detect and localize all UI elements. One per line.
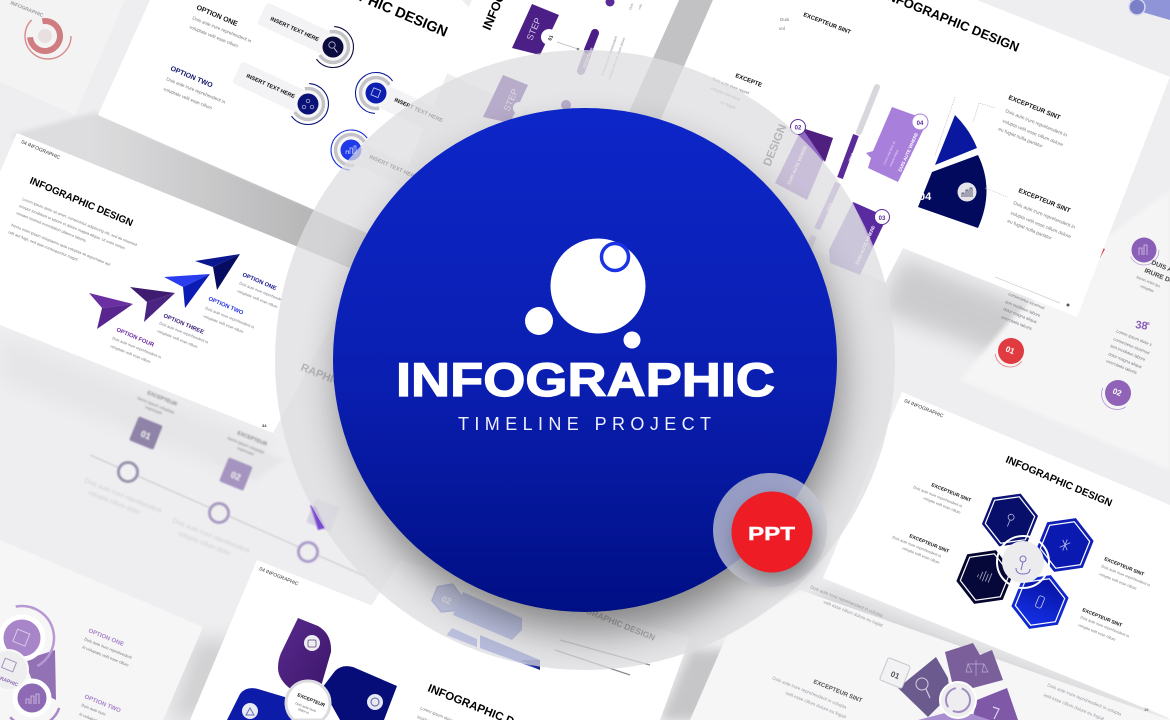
pie label: 04 bbox=[919, 191, 932, 203]
body text: Lorem ipsum dolor sit amet, consectetur adipiscing elit, sed do eiusmod bbox=[22, 196, 138, 247]
vertical word: DESIGN bbox=[762, 123, 789, 168]
option two: Duis aute irure reprehenderit in bbox=[205, 306, 255, 330]
badge: 01 bbox=[995, 337, 1025, 367]
petal chart: 01 bbox=[889, 670, 901, 681]
text block 1: Duis aute irure reprehenderit in bbox=[913, 485, 963, 509]
card: 02: Nemo ipsum voluptate bbox=[227, 435, 266, 455]
arrow four bbox=[89, 293, 133, 329]
icon: purple chart circle bbox=[1129, 235, 1159, 265]
left text: EXCEPTEUR SINT bbox=[812, 679, 863, 704]
card right: DUIS AUTE WHERE bbox=[897, 132, 919, 172]
text block 1: volupta velit esse cillum bbox=[923, 496, 961, 515]
option three: Duis aute irure reprehenderit in bbox=[159, 321, 209, 345]
arrow two bbox=[164, 274, 210, 308]
option one: in voluptate velit esse cillum bbox=[82, 644, 130, 668]
option two bbox=[79, 694, 122, 720]
pill: insert text 3 bbox=[371, 82, 445, 133]
left body text: dolor magna aliqua bbox=[1003, 306, 1038, 325]
timeline nodes bbox=[118, 462, 318, 562]
icon: chart bbox=[329, 128, 373, 172]
arrow one bbox=[195, 254, 240, 290]
circle shadow bbox=[340, 132, 840, 632]
step text: volu bbox=[637, 3, 643, 10]
timeline captions bbox=[83, 477, 251, 558]
body text: veniam nostrud exercitation ullamco laboris. bbox=[16, 210, 88, 243]
badge: PPT: PPT bbox=[748, 523, 796, 544]
card bottom: DUIS AUTE WHERE bbox=[854, 225, 876, 265]
option four: Duis aute irure reprehenderit in bbox=[112, 336, 162, 360]
icon: red target bbox=[25, 13, 71, 59]
text block 2: Duis aute irure reprehenderit in bbox=[892, 535, 942, 559]
timeline captions: volupta cillum dolor bbox=[177, 530, 232, 558]
card: 01: EXCEPTEUR bbox=[146, 390, 178, 408]
left text: velit esse cillum dolore eu fugiat bbox=[785, 690, 848, 720]
option one bbox=[189, 4, 253, 49]
step pill: EXCEPTEUR bbox=[582, 47, 594, 68]
text block 4: volupta velit esse cillum bbox=[1078, 623, 1116, 642]
text block 1 bbox=[913, 482, 972, 515]
step text bbox=[600, 2, 643, 80]
card bottom bbox=[829, 202, 890, 275]
card: 02: expersant bbox=[237, 445, 256, 457]
left text bbox=[772, 675, 863, 720]
navy petal bbox=[322, 666, 397, 720]
pie icon bbox=[958, 182, 976, 202]
red marker bbox=[1100, 247, 1105, 258]
hexagon 02 bbox=[429, 579, 465, 617]
body text bbox=[8, 196, 138, 267]
left body text: exercitatio laboris bbox=[1001, 314, 1033, 331]
pie connectors bbox=[935, 97, 1008, 197]
option one: Duis aute irure reprehenderit in bbox=[192, 15, 253, 44]
text top left: Duis bbox=[780, 17, 790, 22]
page number: 34 bbox=[262, 423, 267, 428]
card right: 04 bbox=[917, 121, 924, 127]
option four: voluptate velit esse cillum bbox=[110, 344, 151, 364]
subtitle: TIMELINE PROJECT bbox=[458, 414, 711, 434]
badge: 02: 02 bbox=[1111, 387, 1123, 398]
timeline captions: volupta cillum dolor bbox=[87, 489, 142, 517]
slide: top left faded target bbox=[0, 0, 125, 115]
slide: purple cards + pie bbox=[640, 0, 1170, 317]
text block 2: volupta velit esse cillum bbox=[902, 546, 940, 565]
faded lines bbox=[555, 640, 650, 675]
slide: flower bottom center bbox=[190, 560, 660, 720]
band end bbox=[520, 660, 540, 670]
option two bbox=[163, 65, 227, 111]
label band bbox=[453, 592, 522, 640]
upper caption: Duis aute irure reprehenderit in volupta bbox=[810, 584, 884, 618]
right text: Duis aute irure reprehenderit in volupta bbox=[1047, 682, 1123, 717]
hexagon: blue bbox=[1031, 509, 1099, 581]
icon: search bbox=[311, 25, 355, 69]
card text: voluptas bbox=[1140, 284, 1154, 293]
text block 3: volupta velit esse cillum bbox=[1099, 572, 1137, 591]
option two: Duis aute irure reprehenderit in bbox=[166, 76, 227, 105]
progress rail: 2018 bbox=[847, 152, 856, 162]
icon: network bbox=[286, 82, 330, 126]
step card one bbox=[512, 4, 559, 55]
option two bbox=[203, 296, 255, 334]
badge: PPT bbox=[713, 473, 827, 587]
option two: voluptate velit esse cillum bbox=[203, 314, 244, 334]
card right: Lorem sed dolor sit bbox=[882, 140, 896, 165]
text block two bbox=[1006, 187, 1076, 242]
text left: eu fugiat bbox=[720, 99, 737, 110]
step card one: 01 bbox=[547, 34, 555, 42]
card: 03 under ring bbox=[306, 498, 340, 532]
option two: voluptate velit esse cillum bbox=[163, 86, 213, 111]
blue petal bbox=[227, 688, 296, 720]
slide: hexagons right bbox=[823, 392, 1170, 720]
logo bbox=[525, 238, 646, 348]
body text: odit aut fugit, sed quia consequuntur magni bbox=[8, 229, 79, 262]
left text: Duis aute irure reprehenderit in volupta bbox=[772, 675, 848, 710]
stat: 38: 38 bbox=[1135, 319, 1148, 333]
card left: 02 bbox=[795, 126, 802, 132]
pill: insert text 1: INSERT TEXT HERE bbox=[269, 16, 320, 43]
text block 2: EXCEPTEUR SINT bbox=[908, 533, 950, 555]
stat: 38: s bbox=[1147, 321, 1150, 327]
slide: top left faded target: INFOGRAPHIC bbox=[9, 0, 44, 19]
center badge: EXCEPTEUR bbox=[296, 692, 326, 709]
arrow three bbox=[130, 287, 175, 322]
text block 3: EXCEPTEUR SINT bbox=[1103, 556, 1145, 578]
text left bbox=[710, 73, 763, 110]
option one: Duis aute irure reprehende bbox=[239, 281, 282, 302]
hexagon: dark bbox=[951, 541, 1019, 613]
main blue circle bbox=[333, 108, 837, 612]
card: 01 bbox=[120, 390, 190, 450]
slide label: 04 INFOGRAPHIC bbox=[903, 398, 944, 420]
text block one: eu fugiat nulla pariatur bbox=[997, 126, 1044, 150]
slide: timeline faded bbox=[83, 390, 367, 577]
pill: insert text 4 bbox=[346, 140, 419, 190]
top right pill bbox=[1129, 0, 1170, 20]
option two: OPTION TWO bbox=[207, 296, 244, 317]
title: INFOGRAPHIC DESIGN bbox=[28, 176, 134, 229]
left body text bbox=[1001, 291, 1046, 331]
text top left: vol bbox=[779, 26, 785, 31]
text block two: volupta velit esse cillum dolore bbox=[1009, 210, 1072, 240]
body text: tempor incididunt ut labore et dolore magna aliqua. Ut enim minim bbox=[19, 203, 126, 250]
title: INFOGRAPHIC DESIGN bbox=[1004, 455, 1113, 509]
center badge bbox=[997, 536, 1049, 588]
hexagon: navy bbox=[976, 484, 1044, 556]
option one: OPTION ONE bbox=[241, 272, 277, 292]
glass ring bbox=[275, 50, 895, 670]
center badge: dolor in bbox=[298, 707, 310, 715]
card text bbox=[1136, 259, 1170, 293]
card: 01: Nemo ipsum voluptate bbox=[137, 395, 176, 415]
pill: insert text 2 bbox=[232, 61, 307, 113]
slide label: 04 INFOGRAPHIC bbox=[258, 566, 299, 588]
hexagon 02: 02 bbox=[440, 594, 453, 606]
card right: volupta aliqua bbox=[888, 149, 900, 167]
text block two: EXCEPTEUR SINT bbox=[1017, 187, 1071, 215]
center badge bbox=[286, 681, 330, 720]
text block two: eu fugiat nulla pariatur bbox=[1006, 218, 1053, 242]
footer bbox=[995, 277, 1070, 306]
purple petal bbox=[278, 618, 331, 698]
circle chart bbox=[0, 601, 69, 720]
option one: Duis aute irure reprehenderit bbox=[84, 636, 134, 660]
option one: voluptate velit esse cillum bbox=[237, 289, 278, 309]
text block 4: EXCEPTEUR SINT bbox=[1081, 607, 1123, 629]
text block 4 bbox=[1078, 607, 1130, 642]
option one: OPTION ONE bbox=[87, 628, 124, 648]
pill: insert text 3: INSERT TEXT HERE bbox=[393, 97, 444, 124]
under-ring title: RAPHIC bbox=[299, 362, 343, 389]
text left: volupta velit esse bbox=[710, 85, 742, 102]
card: 02 bbox=[210, 430, 285, 491]
progress rail: 2019 bbox=[825, 202, 834, 212]
option three: OPTION THREE bbox=[162, 313, 205, 336]
stat: 38: exercitatio laboris bbox=[1106, 358, 1138, 375]
card left: DUIS AUTE WHERE bbox=[786, 145, 808, 185]
card: 02: 02 bbox=[229, 470, 242, 483]
text top left: EXCEPTEUR SINT bbox=[802, 12, 852, 36]
left body text: tem incididun labore bbox=[1005, 299, 1042, 318]
left body text: consectetur eiusmod bbox=[1008, 291, 1046, 311]
stat: 38: Lorem ipsum dolor s bbox=[1116, 328, 1153, 347]
option one: OPTION ONE bbox=[195, 4, 239, 28]
pill: insert text 4: INSERT TEXT HERE bbox=[368, 154, 419, 181]
text block 4: Duis aute irure reprehenderit in bbox=[1080, 615, 1130, 639]
card: 02: EXCEPTEUR bbox=[236, 430, 268, 448]
pill: insert text 1 bbox=[257, 2, 332, 54]
slide: center under ring bbox=[300, 560, 690, 720]
badge: 01: 01 bbox=[1004, 345, 1016, 356]
step card one: STEP bbox=[525, 16, 543, 42]
text block one: Duis aute irure reprehenderit in bbox=[1004, 108, 1068, 139]
hexagon: bright blue bbox=[1006, 566, 1074, 638]
badge: 02 bbox=[1102, 378, 1132, 410]
stat: 38 bbox=[1106, 319, 1153, 375]
step text: Duis bbox=[628, 2, 634, 10]
hexagon 03 bbox=[443, 628, 477, 650]
card: 01: expersant bbox=[145, 404, 164, 416]
stat: 38: dolor magna aliqua bbox=[1108, 351, 1143, 370]
petal chart bbox=[879, 643, 1018, 720]
timeline captions: Duis aute irure reprehenderit bbox=[171, 517, 251, 555]
step pill bbox=[581, 33, 595, 71]
slide: step top bbox=[440, 0, 679, 150]
option one bbox=[237, 272, 282, 309]
option three bbox=[157, 313, 209, 349]
faded title: GRAPHIC DESIGN bbox=[584, 606, 657, 643]
option one: voluptate velit esse cillum bbox=[189, 24, 239, 49]
pill: insert text 2: INSERT TEXT HERE bbox=[245, 73, 296, 100]
text block 3 bbox=[1099, 556, 1151, 591]
text block one bbox=[997, 94, 1068, 150]
text block two: Duis aute irure reprehenderit in bbox=[1012, 200, 1076, 231]
step card two: STEP bbox=[502, 87, 520, 113]
card bottom: 03 bbox=[879, 216, 886, 222]
option one bbox=[82, 628, 134, 668]
slide: right faded numbers bbox=[960, 190, 1170, 470]
step card two bbox=[483, 75, 528, 123]
option two: Duis aute irure bbox=[81, 702, 107, 717]
step text: Duis aute irure reprehenderit bbox=[600, 35, 618, 76]
lower pill bbox=[561, 100, 571, 110]
option four: OPTION FOUR bbox=[115, 327, 155, 349]
slide: bottom right petals faded bbox=[690, 584, 1170, 720]
pie chart bbox=[918, 115, 986, 228]
main title: INFOGRAPHIC bbox=[396, 354, 775, 407]
card right bbox=[866, 107, 928, 182]
card left bbox=[775, 120, 833, 200]
card: 01: 01 bbox=[139, 429, 152, 442]
step text: volupta velit esse cillum dolore bbox=[607, 37, 626, 80]
connector bbox=[557, 42, 579, 50]
label band lower bbox=[480, 635, 540, 670]
text block 1: EXCEPTEUR SINT bbox=[930, 482, 972, 504]
slide: top options bbox=[98, 0, 473, 238]
timeline captions: Duis aute irure reprehenderit bbox=[83, 477, 163, 515]
small pill bbox=[606, 0, 614, 6]
card text: Nemo enim ips bbox=[1136, 275, 1161, 288]
option three: voluptate velit esse cillum bbox=[157, 329, 198, 349]
center badge: Duis aute irure bbox=[295, 701, 317, 713]
text block 2 bbox=[892, 533, 950, 565]
slide: bottom left circles faded bbox=[0, 540, 203, 720]
body text: Nemo enim ipsam voluptatem quia voluptas sit aspernatur aut bbox=[11, 222, 112, 267]
text block 3: Duis aute irure reprehenderit in bbox=[1101, 564, 1151, 588]
page number: 19 bbox=[1144, 707, 1149, 712]
slide: arrows bbox=[0, 133, 360, 433]
right panel content bbox=[995, 235, 1170, 410]
text left: EXCEPTE bbox=[734, 73, 763, 89]
icon: documents bbox=[354, 71, 398, 115]
text left: Duis aute irure repref bbox=[712, 76, 751, 96]
option two: OPTION TWO bbox=[169, 65, 214, 90]
slide label: 04 INFOGRAPHIC bbox=[20, 139, 61, 161]
text top left bbox=[779, 12, 852, 36]
stat: 38: tem incididun labore bbox=[1110, 343, 1147, 362]
option two: OPTION TWO bbox=[83, 694, 122, 714]
text block one: EXCEPTEUR SINT bbox=[1007, 94, 1061, 122]
upper caption: velit esse cillum dolore eu fugiat bbox=[823, 599, 884, 628]
stat: 38: consectetur eiusmod bbox=[1113, 336, 1151, 356]
option four bbox=[110, 327, 162, 364]
progress rail bbox=[806, 87, 877, 256]
text block one: volupta velit esse cillum dolore bbox=[1001, 118, 1064, 148]
